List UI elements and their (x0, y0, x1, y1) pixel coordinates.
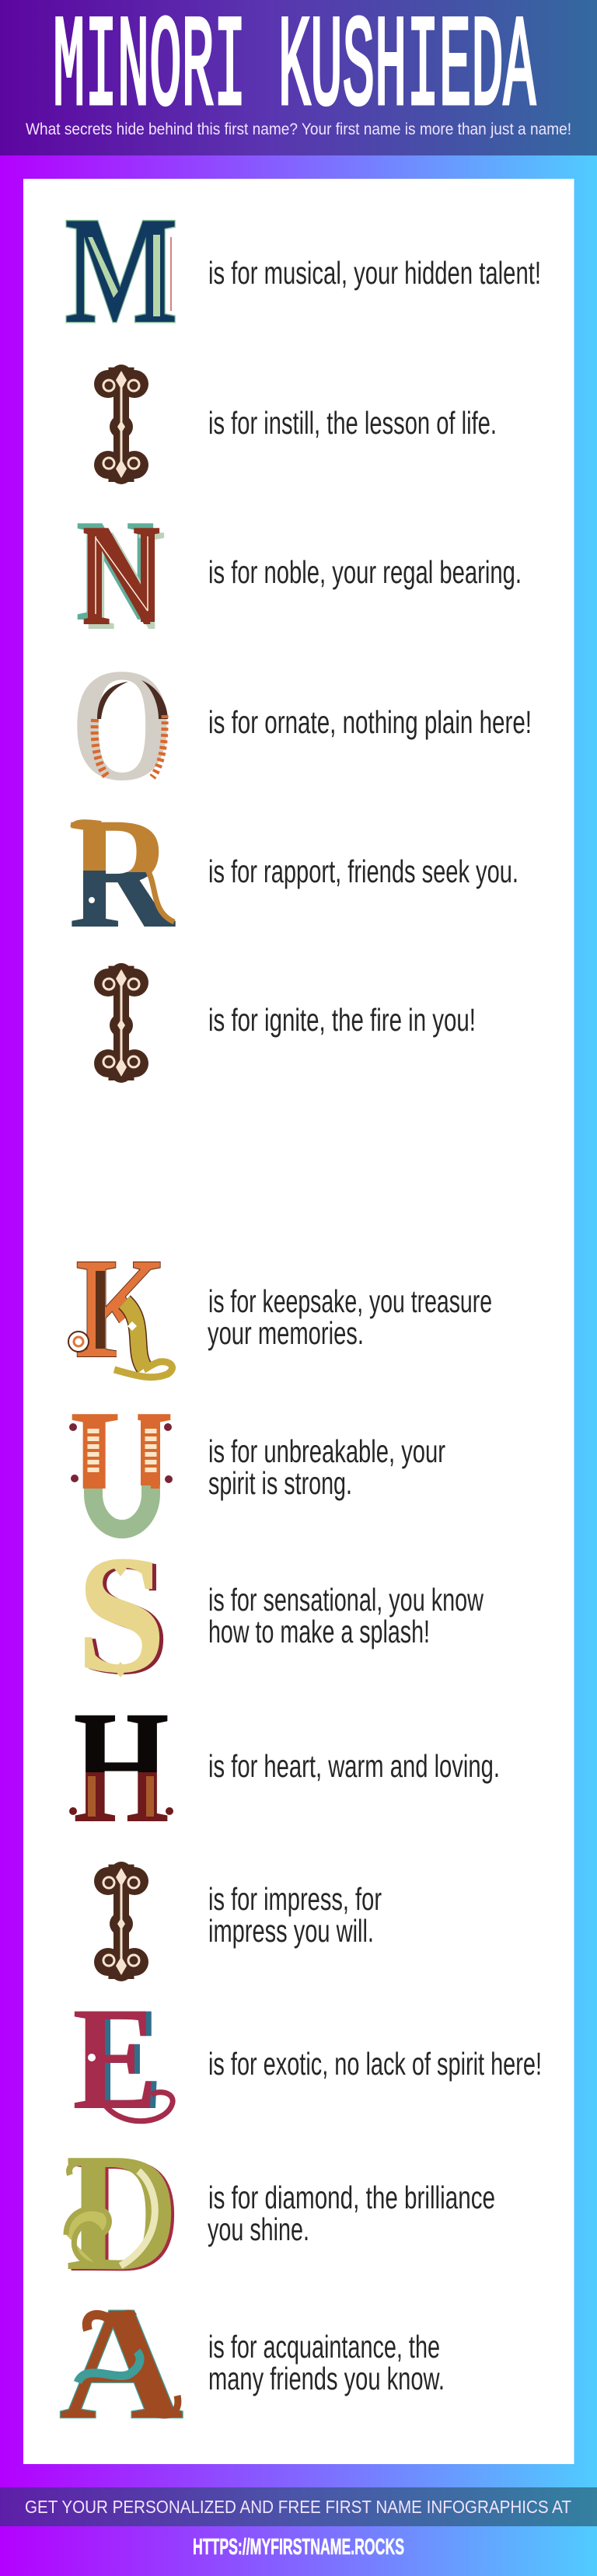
text: I third lines: is for impress, for (208, 1881, 382, 1917)
icon: letter S: S (80, 1523, 170, 1710)
icon: letter R: R (68, 785, 176, 962)
row: M (65, 185, 541, 355)
row: H (69, 1677, 500, 1856)
icon: letter A: A (59, 2274, 183, 2452)
text: A lines: many friends you know. (208, 2361, 445, 2396)
icon: letter N: N (82, 494, 161, 656)
icon: letter N: N (75, 489, 155, 651)
icon: letter E: E (72, 1977, 158, 2141)
icon: letter E: E (78, 1977, 163, 2141)
text: D lines (208, 2180, 495, 2247)
text: U lines: spirit is strong. (208, 1465, 352, 1501)
icon: letter H: H (73, 1677, 169, 1856)
icon: letter R (70, 819, 176, 927)
text: S lines: how to make a splash! (208, 1614, 430, 1649)
icon: letter I (94, 326, 148, 520)
text: I second line: is for ignite, the fire in you! (208, 1002, 476, 1038)
row: I third (94, 1823, 382, 2017)
icon: letter U (69, 1414, 173, 1539)
icon: letter R: R (68, 785, 176, 962)
icon: letter K: K (75, 1229, 167, 1388)
text: U lines (208, 1433, 445, 1501)
icon: letter R: R (68, 785, 176, 962)
icon: letter D: D (68, 2120, 182, 2308)
icon: letter D: D (65, 2119, 179, 2306)
text: I third lines: impress you will. (208, 1913, 374, 1949)
text: S lines: is for sensational, you know (208, 1582, 484, 1618)
icon: letter S: S (76, 1521, 166, 1709)
icon: letter N: N (86, 498, 166, 661)
text: D lines: you shine. (208, 2211, 309, 2247)
icon: letter M: M (65, 185, 178, 355)
row: D (65, 2119, 495, 2308)
text: A lines (208, 2329, 445, 2396)
text: D lines: is for diamond, the brilliance (208, 2180, 495, 2215)
row: N (75, 489, 522, 661)
text: U lines: is for unbreakable, your (208, 1433, 445, 1469)
row: R (70, 819, 516, 927)
icon: letter K (68, 1261, 176, 1380)
row: S (76, 1521, 484, 1710)
header band (0, 0, 597, 155)
text: K lines (208, 1283, 492, 1351)
icon: letter H (69, 1715, 173, 1821)
row: I second (94, 924, 476, 1119)
row: K (68, 1261, 491, 1380)
text: S lines (208, 1582, 484, 1649)
row: I (94, 326, 497, 520)
footer band (0, 2487, 597, 2526)
row: O (71, 635, 532, 814)
icon: letter I (94, 1823, 148, 2017)
footer url: HTTPS://MYFIRSTNAME.ROCKS (193, 2535, 404, 2560)
icon: letter I: I (106, 924, 137, 1119)
icon: letter I: I (106, 1823, 137, 2017)
icon: letter H: H (73, 1677, 169, 1856)
text: I third lines (208, 1881, 382, 1949)
icon: letter U: U (68, 1374, 174, 1560)
text: A lines: is for acquaintance, the (208, 2329, 440, 2365)
row: E (72, 1977, 542, 2141)
row: U (69, 1414, 445, 1539)
row: A (59, 2274, 445, 2452)
text: K lines: your memories. (208, 1315, 364, 1351)
icon: letter I: I (106, 326, 137, 520)
icon: letter I (94, 924, 148, 1119)
icon: letter O: O (71, 635, 173, 814)
